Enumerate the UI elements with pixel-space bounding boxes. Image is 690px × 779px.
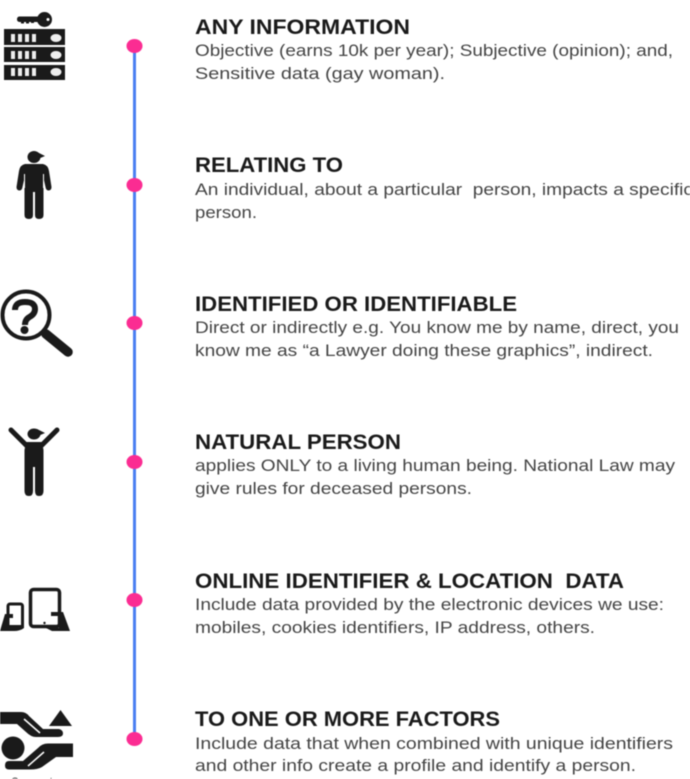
item: any information: Sensitive data (gay woman). [195, 64, 445, 83]
icon: magnifying glass with question mark [2, 292, 68, 352]
item: online identifier and location data [195, 570, 664, 637]
item: online identifier and location data: mobiles, cookies identifiers, IP address, others. [195, 618, 595, 637]
icon: person with raised arms [11, 428, 57, 496]
item: relating to: person. [195, 203, 257, 222]
item: to one or more factors: and other info create a profile and identify a person. [195, 756, 636, 775]
item: any information: ANY INFORMATION [195, 16, 410, 39]
item: any information: Objective (earns 10k per year); Subjective (opinion); and, [195, 41, 673, 60]
item: natural person: applies ONLY to a living human being. National Law may [195, 456, 676, 475]
item: identified or identifiable: IDENTIFIED OR IDENTIFIABLE [195, 293, 517, 316]
item: relating to: An individual, about a particular person, impacts a specific [195, 180, 690, 199]
item: any information [195, 16, 673, 83]
icon: key and server [4, 12, 65, 80]
item: identified or identifiable: Direct or indirectly e.g. You know me by name, direct, you [195, 318, 679, 337]
icon: person [16, 151, 52, 219]
item: to one or more factors [195, 708, 673, 775]
item: online identifier and location data: ONLINE IDENTIFIER & LOCATION DATA [195, 570, 624, 593]
item: relating to [195, 154, 690, 222]
item: natural person: give rules for deceased persons. [195, 479, 472, 498]
item: to one or more factors: Include data that when combined with unique identifiers [195, 734, 673, 753]
item: identified or identifiable: know me as “a Lawyer doing these graphics”, indirect. [195, 341, 653, 360]
item: online identifier and location data: Include data provided by the electronic devices we use: [195, 595, 664, 614]
item: natural person [195, 431, 676, 498]
timeline [126, 39, 142, 746]
icon: hands giving and receiving [0, 710, 73, 770]
icon: phone and tablet in hands [0, 590, 70, 631]
item: natural person: NATURAL PERSON [195, 431, 401, 454]
item: relating to: RELATING TO [195, 154, 343, 177]
item: identified or identifiable [195, 293, 679, 360]
item: to one or more factors: TO ONE OR MORE FACTORS [195, 708, 500, 731]
